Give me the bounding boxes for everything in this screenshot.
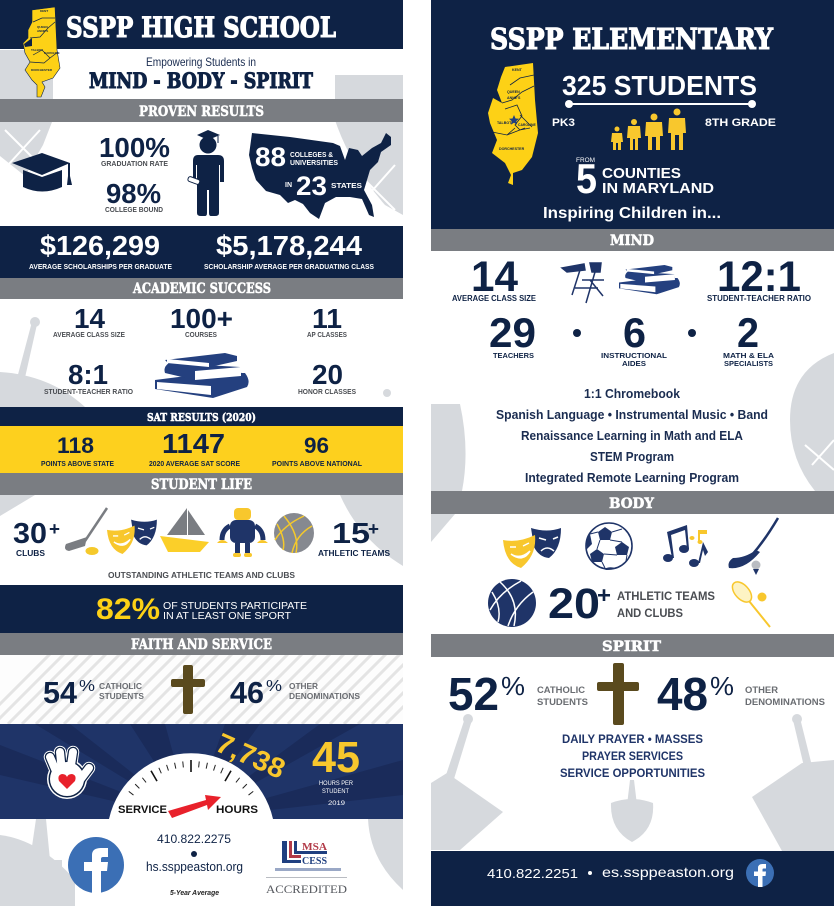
heading: SAT results: SAT RESULTS (2020): [147, 410, 256, 424]
band: elementary footer: [431, 851, 834, 906]
logo: MSA CESS accredited: MSA: [302, 842, 328, 853]
icon: facebook: [746, 859, 774, 887]
stat: average scholarships: $126,299: [40, 230, 160, 261]
stat: scholarship total: SCHOLARSHIP AVERAGE PER GRADUATING CLASS: [204, 262, 374, 271]
stat: catholic students: CATHOLIC: [537, 685, 586, 695]
map: elementary counties: KENT: [512, 68, 523, 72]
panel: high school: [0, 0, 456, 906]
stat: college bound: 98%: [106, 178, 161, 209]
note: five-year average: 5-Year Average: [170, 888, 219, 897]
band: academic success: [0, 278, 403, 299]
map: elementary counties: DORCHESTER: [499, 147, 525, 151]
title: SSPP HIGH SCHOOL: [66, 11, 336, 44]
stat: instructional aides: [601, 309, 667, 368]
map: high school counties: TALBOT: [31, 48, 43, 52]
text block: faith activities: SERVICE OPPORTUNITIES: [560, 766, 705, 780]
stat: other denominations: 46: [230, 675, 264, 710]
stat: athletic teams and clubs: +: [597, 582, 611, 608]
stat: class size: AVERAGE CLASS SIZE: [452, 294, 537, 303]
icon: books: [155, 353, 249, 398]
timeline: grade range: PK3: [552, 117, 575, 129]
stat: specialists: SPECIALISTS: [724, 359, 773, 368]
icon: basketball: [274, 513, 314, 553]
map: united states: 23: [296, 171, 327, 201]
band: proven results: [0, 99, 403, 122]
map: high school counties: [23, 7, 60, 97]
stat: other denominations: DENOMINATIONS: [745, 697, 825, 707]
map: high school counties: KENT: [40, 9, 48, 13]
stat: catholic students: CATHOLIC: [99, 682, 142, 691]
contact: elementary: [487, 864, 734, 881]
stat: graduation rate: GRADUATION RATE: [101, 159, 168, 168]
band: SAT results: [0, 407, 403, 426]
panel: faith stripes: [0, 655, 403, 724]
icon: music notes: [663, 525, 708, 567]
stat: points above state: 118: [57, 433, 94, 458]
stat: scholarship total: [204, 230, 374, 271]
text block: programs: Renaissance Learning in Math and ELA: [521, 429, 743, 443]
stat: scholarship total: $5,178,244: [216, 230, 362, 261]
stat: college bound: COLLEGE BOUND: [105, 205, 164, 214]
stat: other denominations: OTHER: [289, 682, 318, 691]
stat: athletic teams: +: [368, 519, 379, 539]
stat: other denominations: %: [710, 671, 734, 701]
stat: specialists: 2: [737, 309, 759, 356]
contact: high school: 410.822.2275: [157, 834, 231, 846]
separator dot: [573, 329, 581, 337]
stat: class size: 14: [74, 303, 105, 334]
map: high school counties: CAROLINE: [44, 51, 60, 55]
heading: academic success: ACADEMIC SUCCESS: [132, 281, 271, 297]
icon: hockey stick and ball: [728, 518, 778, 575]
text block: programs: Integrated Remote Learning Program: [525, 471, 739, 485]
map: united states: [249, 133, 391, 219]
text block: programs: STEM Program: [590, 450, 674, 464]
caption: outstanding teams: OUTSTANDING ATHLETIC TEAMS AND CLUBS: [108, 571, 296, 580]
contact: elementary: 410.822.2251: [487, 866, 578, 881]
map: elementary counties: TALBOT: [497, 121, 512, 125]
band: faith and service: [0, 633, 403, 655]
stat: student teacher ratio: 12:1: [717, 253, 801, 301]
stat: clubs: [13, 518, 60, 558]
icon: graduate figure: [187, 130, 224, 216]
contact: high school: [146, 834, 243, 874]
icon: theatre masks: [503, 528, 561, 568]
text block: programs: Spanish Language • Instrumental Music • Band: [496, 408, 768, 422]
heading: mind body spirit: MIND - BODY - SPIRIT: [89, 68, 313, 93]
stat: five counties: [576, 155, 714, 202]
text block: programs: [496, 387, 768, 485]
stat: graduation rate: 100%: [99, 132, 170, 163]
icon: lacrosse stick: [729, 578, 770, 627]
stat: student teacher ratio: STUDENT-TEACHER RATIO: [44, 389, 134, 396]
stat: student teacher ratio: 8:1: [68, 359, 108, 390]
text block: programs: 1:1 Chromebook: [584, 387, 680, 401]
text block: faith activities: [560, 732, 705, 780]
icon: robot: [217, 508, 268, 557]
stat: athletic teams and clubs: [548, 580, 715, 628]
stat: athletic teams: ATHLETIC TEAMS: [318, 549, 391, 558]
stat: instructional aides: AIDES: [622, 359, 646, 368]
stat: clubs: +: [49, 519, 60, 539]
band: mind: [431, 229, 834, 251]
timeline: grade range: 8TH GRADE: [705, 117, 776, 129]
stat: other denominations: %: [266, 678, 282, 695]
stat: hours per student: 45: [312, 733, 360, 782]
stat: five counties: IN MARYLAND: [602, 180, 714, 197]
separator dot: [688, 329, 696, 337]
map: high school counties: ANNE'S: [37, 29, 48, 33]
map: elementary counties: ANNE'S: [507, 96, 521, 100]
stat: points above state: POINTS ABOVE STATE: [41, 459, 114, 468]
stat: AP classes: 11: [312, 303, 342, 334]
stat: hours per student: [312, 733, 360, 807]
stat: catholic students: 54: [43, 675, 78, 710]
band: spirit: [431, 634, 834, 657]
stat: honor classes: 20: [312, 359, 343, 390]
text block: faith activities: PRAYER SERVICES: [582, 749, 683, 763]
stat: specialists: [723, 309, 775, 368]
map: elementary counties: QUEEN: [507, 90, 520, 94]
stat: average SAT score: [149, 428, 240, 468]
stat: catholic students: %: [501, 671, 525, 701]
stat: class size: [452, 253, 537, 303]
stat: other denominations: DENOMINATIONS: [289, 692, 361, 701]
stat: hours per student: 2019: [328, 800, 345, 807]
band: body: [431, 491, 834, 514]
map: united states: IN: [285, 182, 292, 189]
tagline: Inspiring Children in...: [543, 205, 721, 222]
label: service: SERVICE: [118, 804, 167, 816]
arrow: gauge needle: [168, 795, 221, 818]
stat: other denominations: [230, 675, 361, 710]
map: elementary counties: [488, 63, 538, 185]
stat: athletic teams: [318, 518, 391, 558]
stat: teachers: 29: [489, 309, 536, 356]
label: hours: HOURS: [216, 804, 258, 816]
icon: graduation cap: [12, 153, 72, 192]
stat: athletic teams: 15: [332, 518, 370, 550]
band: sport participation: [0, 585, 403, 633]
icon: basketball: [488, 579, 536, 627]
icon: cross: [597, 663, 639, 725]
map: high school counties: QUEEN: [37, 25, 48, 29]
stat: other denominations: 48: [657, 668, 708, 720]
stat: teachers: TEACHERS: [493, 351, 534, 360]
stat: catholic students: [43, 675, 145, 710]
map: elementary counties: CAROLINE: [518, 123, 536, 127]
band: scholarships: [0, 226, 403, 278]
background watermark: elementary: [431, 353, 834, 851]
stat: class size: AVERAGE CLASS SIZE: [53, 332, 125, 339]
stat: sport participation: OF STUDENTS PARTICIPATE: [163, 601, 307, 612]
stat: courses: 100+: [170, 303, 233, 334]
stat: average SAT score: 2020 AVERAGE SAT SCORE: [149, 459, 240, 468]
heading: spirit: SPIRIT: [602, 639, 662, 655]
stat: class size: [53, 303, 125, 339]
icon: school desk: [562, 263, 604, 303]
stat: courses: COURSES: [185, 332, 217, 339]
stat: points above national: POINTS ABOVE NATIONAL: [272, 459, 362, 468]
icon: books: [619, 265, 680, 294]
stat: sport participation: IN AT LEAST ONE SPORT: [163, 611, 291, 622]
stat: student teacher ratio: STUDENT-TEACHER RATIO: [707, 294, 811, 303]
band: SAT scores: [0, 426, 403, 473]
map: high school counties: DORCHESTER: [31, 68, 53, 72]
icon: cross: [171, 665, 205, 714]
logo: MSA CESS accredited: CESS: [302, 856, 327, 867]
stat: hours per student: HOURS PER: [319, 781, 354, 787]
stat: catholic students: 52: [448, 668, 499, 720]
map: united states: STATES: [331, 183, 362, 190]
stat: catholic students: STUDENTS: [99, 692, 145, 701]
stat: clubs: 30: [13, 518, 47, 550]
stat: athletic teams and clubs: 20: [548, 580, 600, 628]
icon: growing students: [611, 108, 686, 150]
stat: class size: 14: [471, 253, 518, 301]
stat: other denominations: OTHER: [745, 685, 779, 695]
stat: points above state: [41, 433, 114, 468]
stat: clubs: CLUBS: [16, 549, 46, 558]
stat: AP classes: [307, 303, 347, 339]
stat: sport participation: 82%: [96, 593, 160, 626]
background watermark: high school: [0, 50, 403, 906]
stat: five counties: COUNTIES: [602, 165, 681, 182]
contact: elementary: es.ssppeaston.org: [602, 864, 734, 880]
stat: hours per student: STUDENT: [322, 789, 349, 795]
stat: instructional aides: INSTRUCTIONAL: [601, 351, 667, 360]
title: SSPP ELEMENTARY: [490, 22, 773, 56]
stat: average SAT score: 1147: [162, 428, 225, 459]
stat: points above national: [272, 433, 362, 468]
logo: MSA CESS accredited: ACCREDITED: [266, 882, 347, 896]
stat: average scholarships: [29, 230, 172, 271]
stat: catholic students: [448, 668, 588, 720]
stat: honor classes: HONOR CLASSES: [298, 389, 356, 396]
stat: AP classes: AP CLASSES: [307, 332, 347, 339]
timeline: grade range: [552, 100, 776, 129]
map: united states: UNIVERSITIES: [290, 160, 338, 167]
panel: elementary: [431, 0, 834, 906]
gauge dial: [109, 753, 273, 819]
stat: instructional aides: 6: [623, 309, 646, 356]
text block: faith activities: DAILY PRAYER • MASSES: [562, 732, 703, 746]
stat: honor classes: [298, 359, 356, 396]
icon: soccer ball: [586, 523, 632, 570]
map: united states: COLLEGES &: [290, 152, 333, 159]
logo: MSA CESS accredited: [266, 841, 347, 896]
band: student life: [0, 473, 403, 495]
tagline: Empowering Students in: [146, 55, 256, 69]
icon: hockey stick: [65, 508, 107, 555]
contact: high school: hs.ssppeaston.org: [146, 860, 243, 874]
map: united states: 88: [255, 142, 286, 172]
stat: five counties: 5: [576, 155, 597, 202]
header band: [431, 0, 834, 229]
icon: facebook: [68, 837, 124, 893]
header band: [0, 0, 403, 49]
heading: body: BODY: [609, 496, 655, 512]
heading: mind: MIND: [610, 233, 654, 249]
stat: catholic students: STUDENTS: [537, 697, 588, 707]
icon: sailboat: [160, 508, 209, 552]
stat: five counties: FROM: [576, 158, 595, 164]
heading: proven results: PROVEN RESULTS: [139, 104, 264, 120]
stat: student teacher ratio: [44, 359, 134, 396]
heading: faith and service: FAITH AND SERVICE: [131, 637, 272, 653]
stat: specialists: MATH & ELA: [723, 351, 775, 360]
heading: student life: STUDENT LIFE: [151, 477, 252, 493]
icon: theatre masks: [107, 520, 157, 554]
stat: other denominations: [657, 668, 825, 720]
panel: service hours: [0, 724, 403, 819]
stat: sport participation: [96, 593, 307, 626]
stat: points above national: 96: [304, 433, 329, 458]
stat: 325 students: 325 STUDENTS: [562, 70, 757, 101]
stat: average scholarships: AVERAGE SCHOLARSHIPS PER GRADUATE: [29, 262, 172, 271]
icon: hand with heart: [47, 752, 89, 799]
stat: catholic students: %: [79, 678, 95, 695]
stat: 7,738 service hours: 7,738: [212, 727, 290, 785]
stat: athletic teams and clubs: AND CLUBS: [617, 606, 683, 620]
stat: athletic teams and clubs: ATHLETIC TEAMS: [617, 589, 715, 603]
